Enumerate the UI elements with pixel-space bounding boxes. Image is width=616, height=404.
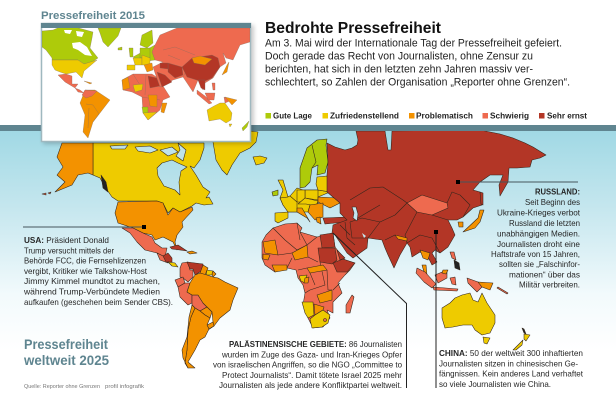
callout: USA: Behörde FCC, die Fernsehlizenzen <box>24 256 146 266</box>
intro text: Am 3. Mai wird der Internationale Tag der Pressefreiheit gefeiert. <box>265 38 562 50</box>
callout: Russia: Haftstrafe von 15 Jahren, <box>491 249 580 259</box>
header band <box>0 125 616 131</box>
map: Africa <box>262 223 355 328</box>
callout: Russia <box>491 186 581 290</box>
source line <box>24 384 144 390</box>
callout: USA <box>23 235 173 307</box>
legend: Gute Lage <box>273 112 313 120</box>
leader line: USA <box>23 225 146 229</box>
callout: USA: während Trump-Verbündete Medien <box>23 286 160 296</box>
leader line: China <box>434 230 438 388</box>
source line: profil infografik <box>105 384 144 390</box>
callout: Russia: unabhängigen Medien. <box>497 228 580 238</box>
map: Asia and Russia <box>327 130 546 294</box>
intro text <box>265 38 570 88</box>
legend: Problematisch <box>416 112 473 120</box>
callout: China <box>439 348 584 389</box>
legend: Zufriedenstellend <box>330 112 399 120</box>
callout: Palestinian territories <box>213 339 402 390</box>
map: North America <box>42 131 267 267</box>
map heading: 2025: Pressefreiheit <box>24 336 108 352</box>
world map 2025 <box>42 130 546 368</box>
callout: Russia: sollten sie „Falschinfor- <box>499 259 580 269</box>
map: South America <box>175 262 238 368</box>
map: Europe <box>272 139 350 224</box>
callout: Russia: Ukraine-Krieges verbot <box>497 208 581 218</box>
callout: USA: Jimmy Kimmel mundtot zu machen, <box>24 276 160 286</box>
inset: map shapes <box>42 27 250 138</box>
callout: China: fängnissen. Kein anderes Land verhaftet <box>439 369 584 379</box>
callout: USA: vergibt, Kritiker wie Talkshow-Host <box>24 266 148 276</box>
callout: USA: Trump versucht mittels der <box>24 245 114 255</box>
callout: Palestinian territories: Protect Journalists“. Damit tötete Israel 2025 mehr <box>222 370 402 380</box>
inset heading: Pressefreiheit 2015 <box>41 10 145 22</box>
callout: Russia: Seit Beginn des <box>525 197 580 207</box>
map: Oceania <box>442 293 530 350</box>
map heading: 2025 <box>23 336 109 368</box>
callout: China: Journalisten sitzen in chinesischen Ge- <box>439 358 578 368</box>
callout: USA: USA: Präsident Donald <box>24 235 109 245</box>
callout: USA: aufkaufen (geschehen beim Sender CBS). <box>24 297 173 307</box>
callout: Palestinian territories: von israelischen Angriffen, so die NGO „Committee to <box>213 360 402 370</box>
legend <box>266 112 587 120</box>
callout: Russia: Militär verbreiten. <box>519 280 580 290</box>
intro text: schlechtert, so Zahlen der Organisation „Reporter ohne Grenzen“. <box>265 76 570 88</box>
callout: Russia: mationen“ über das <box>509 269 580 279</box>
callout: Russia: Russland die letzten <box>509 218 580 228</box>
intro text: berichten, hat sich in den letzten zehn Jahren massiv ver- <box>265 64 533 76</box>
legend: Schwierig <box>490 112 529 120</box>
leader line: Palestinian territories <box>333 233 406 388</box>
title: Bedrohte Pressefreiheit <box>265 20 442 37</box>
callout: China: CHINA: 50 der weltweit 300 inhaftierten <box>439 348 583 358</box>
legend: Sehr ernst <box>547 112 587 120</box>
callout: Palestinian territories: Journalisten als jede andere Konfliktpartei weltweit. <box>219 380 402 390</box>
callout: Russia: Journalisten droht eine <box>497 239 580 249</box>
source line: Quelle: Reporter ohne Grenzen <box>24 384 100 390</box>
callout: Palestinian territories: wurden im Zuge des Gaza- und Iran-Krieges Opfer <box>221 349 402 359</box>
intro text: Doch gerade das Recht von Journalisten, ohne Zensur zu <box>265 50 533 62</box>
map heading: 2025: weltweit 2025 <box>23 352 109 368</box>
panel: press freedom 2015 inset map <box>41 23 254 144</box>
callout: Palestinian territories: PALÄSTINENSISCHE GEBIETE: 86 Journalisten <box>229 339 402 349</box>
leader line: Russia <box>456 180 578 184</box>
callout: Russia: RUSSLAND: <box>535 186 580 196</box>
callout: China: so viele Journalisten wie China. <box>439 379 551 389</box>
